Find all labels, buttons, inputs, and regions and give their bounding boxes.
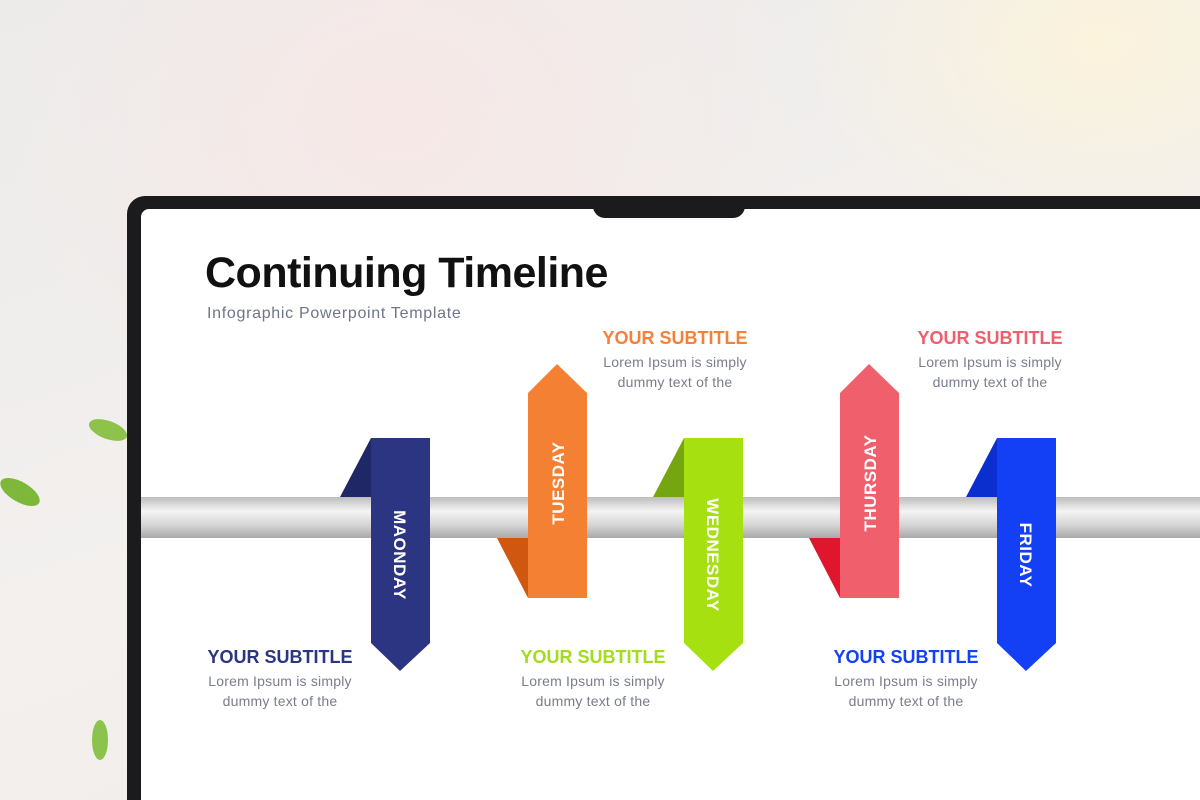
- text: wednesday: Lorem Ipsum is simply: [521, 673, 665, 689]
- text: tuesday: YOUR SUBTITLE: [602, 328, 748, 348]
- text: monday: Lorem Ipsum is simply: [208, 673, 352, 689]
- text: thursday: dummy text of the: [933, 374, 1047, 390]
- subtitle: Infographic Powerpoint Template: [207, 305, 461, 322]
- ribbon: thursday: [809, 364, 899, 598]
- bar: [141, 497, 1200, 538]
- ribbon: thursday: THURSDAY: [861, 434, 880, 531]
- ribbon: monday: [340, 438, 430, 671]
- text: thursday: Lorem Ipsum is simply: [918, 354, 1062, 370]
- screen: [141, 209, 1200, 800]
- text: tuesday: Lorem Ipsum is simply: [603, 354, 747, 370]
- title: Continuing Timeline: [205, 249, 608, 297]
- text: monday: dummy text of the: [223, 693, 337, 709]
- ribbon: monday: MAONDAY: [390, 510, 409, 600]
- text: wednesday: [520, 647, 666, 709]
- notch: [593, 205, 745, 218]
- text: wednesday: dummy text of the: [536, 693, 650, 709]
- ribbon: wednesday: WEDNESDAY: [703, 498, 722, 612]
- text: monday: YOUR SUBTITLE: [207, 647, 352, 667]
- text: thursday: [917, 328, 1062, 390]
- ribbon: tuesday: [497, 364, 587, 598]
- ribbon: wednesday: [653, 438, 743, 671]
- text: friday: Lorem Ipsum is simply: [834, 673, 978, 689]
- ribbon: friday: FRIDAY: [1016, 523, 1035, 588]
- text: tuesday: dummy text of the: [618, 374, 732, 390]
- text: tuesday: [602, 328, 748, 390]
- text: thursday: YOUR SUBTITLE: [917, 328, 1062, 348]
- leaves: [0, 419, 127, 760]
- monitor frame: [127, 196, 1200, 800]
- ribbon: tuesday: TUESDAY: [549, 441, 568, 525]
- text: wednesday: YOUR SUBTITLE: [520, 647, 666, 667]
- text: friday: dummy text of the: [849, 693, 963, 709]
- ribbon: friday: [966, 438, 1056, 671]
- text: friday: YOUR SUBTITLE: [833, 647, 978, 667]
- text: friday: [833, 647, 978, 709]
- text: monday: [207, 647, 352, 709]
